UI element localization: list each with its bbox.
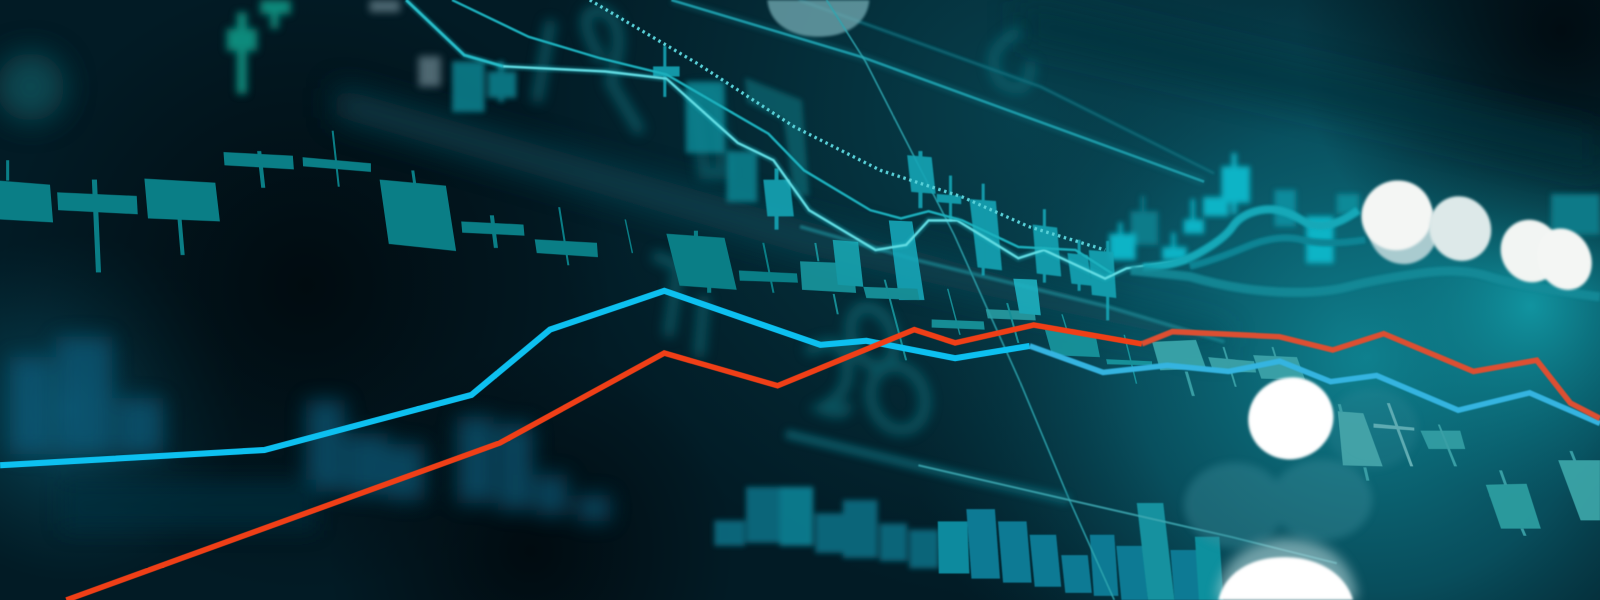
dotted line	[590, 0, 1105, 250]
blurred green candles	[227, 0, 291, 94]
candle 9	[624, 219, 633, 253]
blurred double teal lines right	[1143, 209, 1365, 267]
blurred digit seven	[745, 78, 809, 196]
candle 10	[666, 231, 737, 293]
candle 7	[461, 215, 524, 248]
blue line	[0, 291, 1600, 465]
bokeh light bottom	[1216, 539, 1357, 600]
blurred digits	[537, 10, 1031, 438]
glowing right candles	[1109, 153, 1600, 263]
candlestick chart: pale right row	[1152, 340, 1600, 536]
blurred upper candles	[452, 61, 757, 202]
bar chart: bottom centre	[714, 487, 1223, 600]
wide highlighted diagonal band	[800, 227, 1224, 342]
bokeh light centre	[1237, 365, 1345, 471]
bokeh lights upper right	[1349, 167, 1600, 299]
blue line fading right	[1030, 346, 1600, 423]
pale light disc top	[767, 0, 869, 37]
blurred pink candles	[369, 0, 441, 87]
candle 6	[380, 170, 456, 251]
candle 2	[57, 180, 138, 272]
candle 3	[144, 179, 220, 255]
teal line B	[452, 0, 1112, 273]
thin vertical line	[827, 0, 1114, 600]
diagonal lines upper right	[671, 0, 1214, 182]
candlestick chart: dark teal left row	[0, 131, 798, 293]
small bright candles in the top chart	[653, 46, 1116, 320]
lower diagonal line	[786, 434, 1337, 563]
candle 11	[739, 243, 798, 293]
candle 1	[0, 160, 53, 222]
red line fading right	[1142, 332, 1600, 418]
candle 5	[303, 131, 371, 187]
blurred teal lower curve	[1131, 270, 1600, 297]
dim circles lower right	[1184, 388, 1418, 548]
blurred background bars: left	[10, 337, 610, 531]
candlestick chart: central row	[800, 220, 1152, 384]
candle 8	[535, 207, 598, 265]
candle 4	[223, 151, 294, 188]
teal line A	[406, 0, 1187, 279]
blurred screen bands	[0, 0, 1600, 352]
red line	[66, 325, 1600, 600]
